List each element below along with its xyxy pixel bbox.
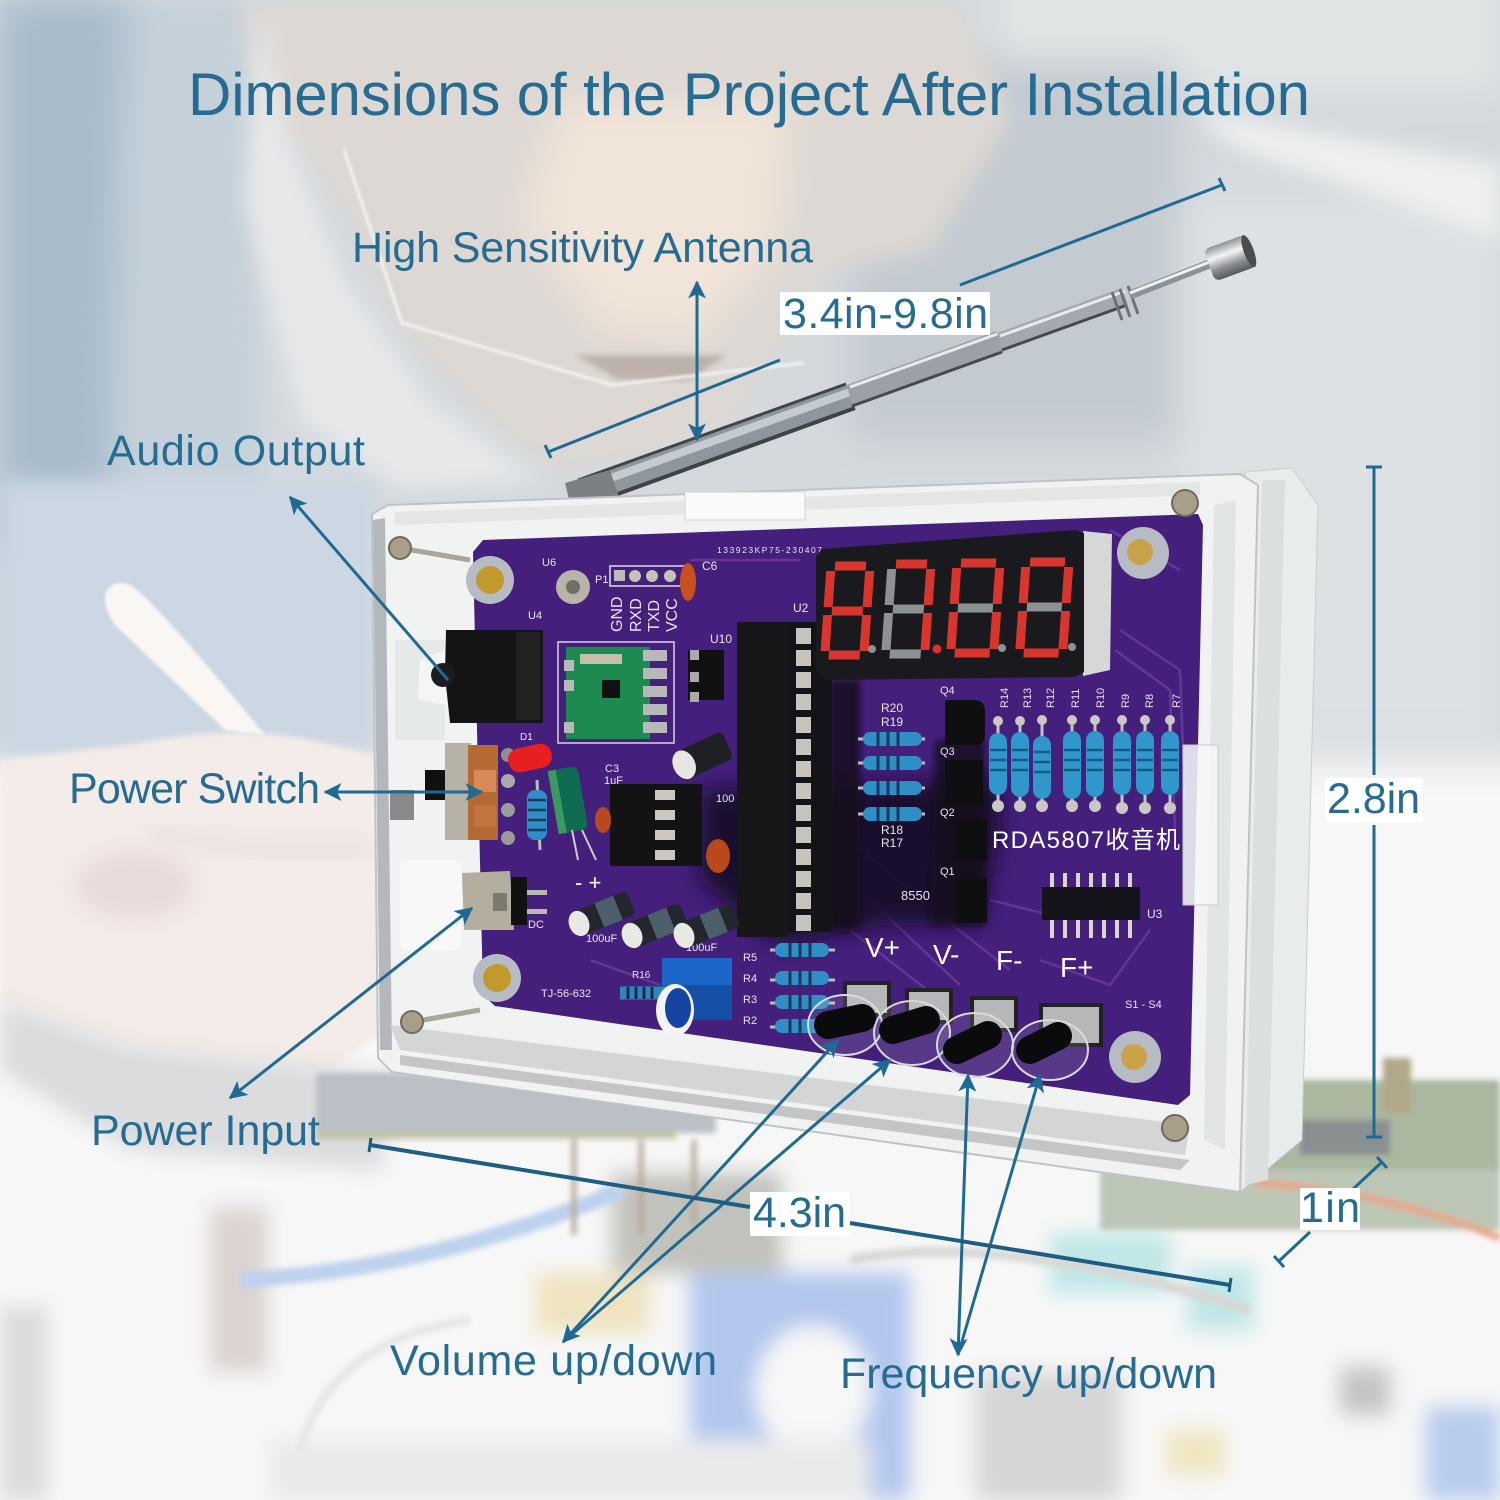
arrow: audio output: [290, 497, 448, 680]
arrows: volume buttons: [563, 1040, 890, 1342]
board silkscreen text: C3: [605, 763, 619, 775]
board silkscreen text: [520, 545, 1183, 1027]
board silkscreen text: R20: [881, 701, 903, 715]
board silkscreen text: RXD: [628, 598, 645, 632]
vertical resistors R7-R14: [990, 715, 1178, 814]
board silkscreen text: U4: [528, 610, 542, 622]
DC jack: [462, 871, 547, 930]
digit 7: [886, 564, 931, 654]
board silkscreen text: S1 - S4: [1125, 999, 1162, 1011]
board silkscreen text: R10: [1095, 688, 1107, 708]
digit 0: [1020, 562, 1069, 653]
op-amp chip with capacitors: [595, 731, 734, 873]
board silkscreen text: P1: [595, 574, 608, 586]
power switch: [425, 743, 515, 845]
dimension: height: [1366, 467, 1382, 1137]
board silkscreen text: DC: [528, 919, 544, 931]
label: high sensitivity antenna: High Sensitivity Antenna: [352, 224, 813, 272]
transistors Q1-Q4: [945, 700, 987, 923]
board silkscreen text: Q1: [940, 866, 955, 878]
header pins: [610, 563, 696, 601]
board silkscreen text: R5: [743, 952, 757, 964]
resistor and electrolytic capacitor: [527, 766, 596, 860]
red LED: [506, 742, 554, 774]
corner screws with rods: [389, 490, 1198, 1141]
board silkscreen text: F+: [1060, 952, 1093, 983]
board silkscreen text: R3: [743, 994, 757, 1006]
board silkscreen text: R19: [881, 715, 903, 729]
board silkscreen text: R8: [1144, 694, 1156, 708]
board silkscreen text: TJ-56-632: [541, 988, 591, 1000]
filter capacitors: [565, 890, 741, 951]
label: 1in: 1in: [1300, 1184, 1360, 1232]
dimension: antenna length: [545, 178, 1225, 458]
board silkscreen text: V-: [933, 939, 959, 970]
board silkscreen text: Q4: [940, 685, 955, 697]
board silkscreen text: RDA5807收音机: [992, 827, 1180, 854]
board silkscreen text: GND: [609, 596, 626, 632]
corner nuts and standoffs: [466, 527, 1169, 1083]
digit 8: [825, 566, 870, 655]
board silkscreen text: R7: [1171, 694, 1183, 708]
board silkscreen text: F-: [996, 945, 1022, 976]
shift register U3: [1042, 873, 1140, 938]
board silkscreen text: R9: [1120, 694, 1132, 708]
board silkscreen text: 8550: [901, 888, 930, 903]
board silkscreen text: R2: [743, 1015, 757, 1027]
board silkscreen text: - +: [575, 870, 601, 895]
board silkscreen text: 100uF: [586, 933, 617, 945]
board silkscreen text: R12: [1045, 688, 1057, 708]
label: power input: Power Input: [91, 1107, 320, 1155]
radio module: [558, 642, 674, 743]
title: Dimensions of the Project After Installation: [188, 61, 1310, 128]
push buttons: [808, 983, 1101, 1080]
blue potentiometer: [620, 958, 732, 1036]
board silkscreen text: 1uF: [604, 775, 623, 787]
board silkscreen text: VCC: [664, 598, 681, 632]
dimension: depth: [1274, 1157, 1387, 1267]
board silkscreen text: R14: [999, 688, 1011, 708]
board silkscreen text: R4: [743, 973, 757, 985]
board silkscreen text: TXD: [646, 600, 663, 632]
board silkscreen text: U3: [1147, 907, 1163, 921]
label: 2.8in: 2.8in: [1327, 775, 1420, 823]
label: power switch: Power Switch: [69, 765, 320, 813]
board silkscreen text: U2: [793, 601, 809, 615]
board silkscreen text: R13: [1022, 688, 1034, 708]
arrow: power switch: [325, 790, 482, 794]
board silkscreen text: 100: [716, 793, 734, 805]
dark reflection on board: [700, 780, 1000, 945]
hand: [0, 733, 385, 1070]
acrylic back plate: [1200, 468, 1318, 1192]
board silkscreen text: R11: [1070, 689, 1082, 708]
board silkscreen text: U6: [542, 557, 556, 569]
label: 3.4in-9.8in: 3.4in-9.8in: [783, 290, 988, 338]
board silkscreen text: Q3: [940, 746, 955, 758]
acrylic front plate: [372, 474, 1258, 1192]
arrow: antenna: [696, 282, 698, 440]
board silkscreen text: R18: [881, 823, 903, 837]
board silkscreen text: V+: [865, 932, 900, 963]
microcontroller U2: [737, 622, 832, 937]
dimension: width: [369, 1138, 1231, 1292]
LED display: [816, 530, 1112, 680]
circuit board: [473, 514, 1203, 1105]
board silkscreen text: D1: [520, 732, 533, 743]
digit 0: [951, 563, 1000, 653]
board silkscreen text: 133923KP75-230407: [717, 545, 822, 555]
arrows: frequency buttons: [958, 1075, 1040, 1355]
board silkscreen text: Q2: [940, 807, 955, 819]
label: audio output: Audio Output: [107, 427, 365, 475]
board silkscreen text: C6: [702, 559, 718, 573]
label: volume up/down: Volume up/down: [390, 1337, 717, 1385]
acrylic slot: [1183, 745, 1218, 905]
pen: [105, 583, 265, 735]
arrow: power input: [230, 908, 472, 1098]
label: 4.3in: 4.3in: [753, 1189, 846, 1237]
horizontal resistors R17-R20 and R2-R5: [770, 732, 925, 1033]
audio jack: [418, 630, 543, 723]
board silkscreen text: R17: [881, 836, 903, 850]
antenna: [565, 233, 1259, 512]
board silkscreen text: U10: [710, 632, 732, 646]
board silkscreen text: 100uF: [686, 942, 717, 954]
board silkscreen text: R16: [632, 970, 651, 981]
radio in clear acrylic case: [372, 468, 1318, 1192]
label: frequency up/down: Frequency up/down: [840, 1350, 1217, 1398]
regulator U10: [688, 650, 724, 702]
